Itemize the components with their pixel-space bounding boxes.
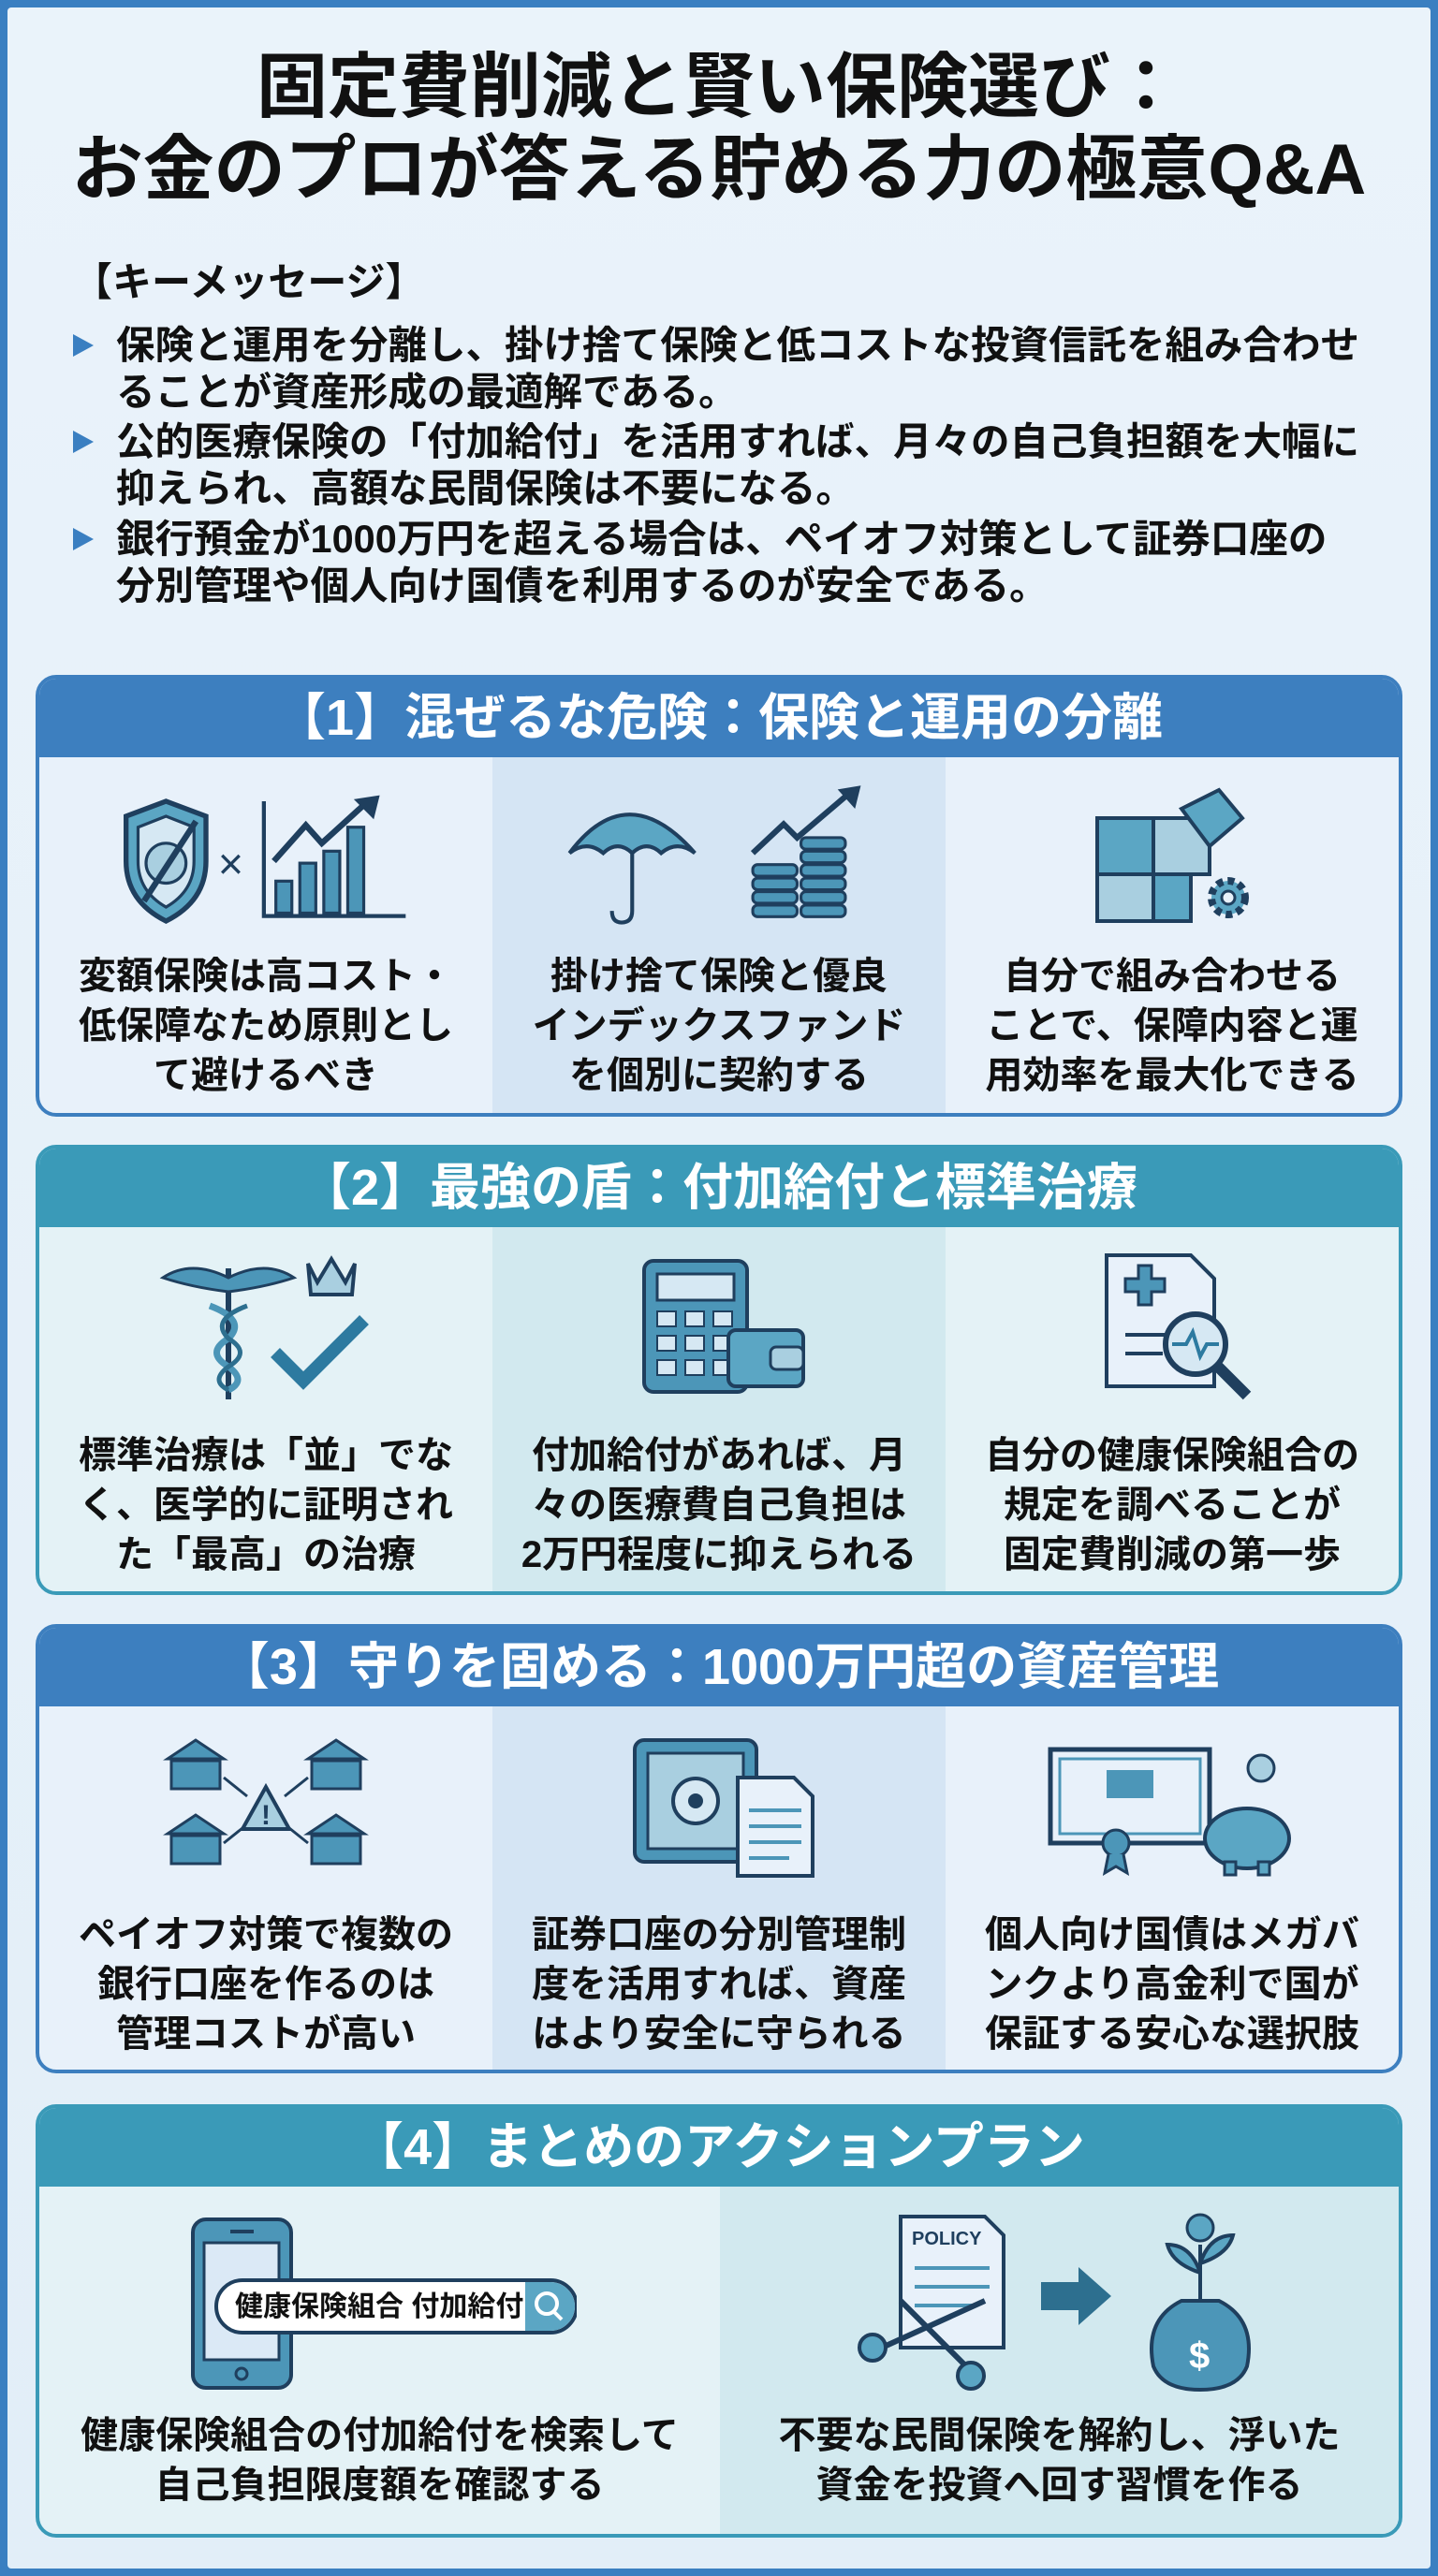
text: 保証する安心な選択肢	[985, 2013, 1359, 2055]
text: 用効率を最大化できる	[985, 1055, 1359, 1096]
title: お金のプロが答える貯める力の極意Q&A	[72, 130, 1366, 210]
text	[79, 1914, 453, 2055]
icon: banks with warning	[163, 1738, 369, 1865]
icon: caduceus crown check	[159, 1255, 369, 1399]
text: 自己負担限度額を確認する	[155, 2465, 605, 2506]
column: government bonds	[985, 1747, 1359, 2055]
text	[521, 1435, 917, 1575]
text: はより安全に守られる	[532, 2013, 906, 2055]
column: combine	[985, 788, 1359, 1096]
text: 資金を投資へ回す習慣を作る	[816, 2465, 1303, 2506]
panel: 1 separation	[36, 675, 1402, 1117]
column: standard care	[79, 1255, 453, 1575]
icon: document with magnifier	[1105, 1253, 1251, 1400]
icon: shield x chart	[124, 796, 406, 924]
icon: policy scissors arrow money bag: POLICY	[912, 2229, 982, 2249]
bullet 2: 公的医療保険の「付加給付」を活用すれば、月々の自己負担額を大幅に	[116, 419, 1359, 463]
text: インデックスファンド	[533, 1005, 905, 1046]
icon: shield x chart: ×	[218, 840, 243, 888]
text: を個別に契約する	[569, 1055, 869, 1096]
text	[81, 2415, 679, 2506]
text: た「最高」の治療	[116, 1534, 416, 1575]
text	[532, 1914, 906, 2055]
text	[79, 1435, 453, 1575]
icon: umbrella and coins	[567, 785, 861, 925]
text: 掛け捨て保険と優良	[550, 956, 888, 997]
text: 自分の健康保険組合の	[985, 1435, 1359, 1476]
panel: 4 action plan	[36, 2104, 1402, 2538]
icon: puzzle and gear	[1095, 788, 1249, 923]
text	[779, 2415, 1341, 2506]
column: additional benefits	[492, 1227, 946, 1591]
text: 個人向け国債はメガバ	[985, 1914, 1359, 1955]
text	[985, 1435, 1359, 1575]
text	[985, 956, 1359, 1096]
text: 標準治療は「並」でな	[79, 1435, 453, 1476]
text: 々の医療費自己負担は	[532, 1485, 906, 1526]
text	[79, 956, 453, 1096]
key message heading: 【キーメッセージ】	[73, 260, 424, 304]
bullet 3	[73, 517, 1327, 607]
panel: 3 protect assets	[36, 1624, 1402, 2073]
heading 2	[39, 1149, 1399, 1227]
text: ンクより高金利で国が	[985, 1964, 1359, 2005]
icon: safe and documents	[633, 1738, 814, 1878]
text: 銀行口座を作るのは	[97, 1964, 434, 2005]
column: segregated management	[492, 1706, 946, 2070]
heading 4: 【4】まとめのアクションプラン	[353, 2119, 1085, 2175]
text: 2万円程度に抑えられる	[521, 1534, 917, 1575]
heading 1: 【1】混ぜるな危険：保険と運用の分離	[275, 690, 1163, 746]
text: 証券口座の分別管理制	[532, 1914, 906, 1955]
text	[533, 956, 905, 1096]
text: 自分で組み合わせる	[1004, 956, 1341, 997]
bullet 2	[73, 419, 1359, 510]
column: search	[81, 2217, 679, 2506]
heading 4	[39, 2108, 1399, 2187]
icon: phone with search bar: 健康保険組合 付加給付	[234, 2291, 523, 2322]
bullet 3: 分別管理や個人向け国債を利用するのが安全である。	[116, 564, 1049, 607]
heading 2: 【2】最強の盾：付加給付と標準治療	[301, 1160, 1137, 1216]
text: 度を活用すれば、資産	[532, 1964, 906, 2005]
panel: 2 shield	[36, 1145, 1402, 1595]
text: て避けるべき	[154, 1055, 378, 1096]
column: cancel and invest	[720, 2187, 1399, 2534]
icon: policy scissors arrow money bag: $	[1189, 2335, 1210, 2377]
text: 変額保険は高コスト・	[79, 956, 453, 997]
column: check rules	[985, 1253, 1359, 1575]
text: 固定費削減の第一歩	[1004, 1534, 1341, 1575]
text: 健康保険組合の付加給付を検索して	[81, 2415, 679, 2456]
heading 1	[39, 679, 1399, 757]
text: 低保障なため原則とし	[79, 1005, 453, 1046]
heading 3	[39, 1628, 1399, 1706]
text: 付加給付があれば、月	[532, 1435, 906, 1476]
title: 固定費削減と賢い保険選び：	[257, 48, 1181, 127]
title	[72, 48, 1366, 210]
icon: phone with search bar	[191, 2217, 577, 2390]
bullet 1: 保険と運用を分離し、掛け捨て保険と低コストな投資信託を組み合わせ	[116, 323, 1359, 367]
text: ことで、保障内容と運	[986, 1005, 1358, 1046]
bullet 1	[73, 323, 1359, 414]
icon: banks with warning: !	[261, 1800, 271, 1831]
bullet 2: 抑えられ、高額な民間保険は不要になる。	[116, 466, 855, 510]
text: 不要な民間保険を解約し、浮いた	[779, 2415, 1341, 2456]
icon: calculator and wallet	[642, 1259, 805, 1394]
text: ペイオフ対策で複数の	[79, 1914, 453, 1955]
column: variable insurance	[79, 796, 453, 1096]
text: く、医学的に証明され	[79, 1485, 453, 1526]
text: 管理コストが高い	[116, 2013, 416, 2055]
icon: certificate and piggy bank	[1049, 1747, 1291, 1876]
bullet 1: ることが資産形成の最適解である。	[116, 370, 738, 414]
bullet 3: 銀行預金が1000万円を超える場合は、ペイオフ対策として証券口座の	[116, 517, 1327, 561]
column: payoff accounts	[79, 1738, 453, 2055]
heading 3: 【3】守りを固める：1000万円超の資産管理	[219, 1639, 1219, 1695]
text	[985, 1914, 1359, 2055]
text: 規定を調べることが	[1004, 1485, 1341, 1526]
column: term insurance + index fund	[492, 757, 946, 1113]
icon: policy scissors arrow money bag	[858, 2213, 1251, 2392]
